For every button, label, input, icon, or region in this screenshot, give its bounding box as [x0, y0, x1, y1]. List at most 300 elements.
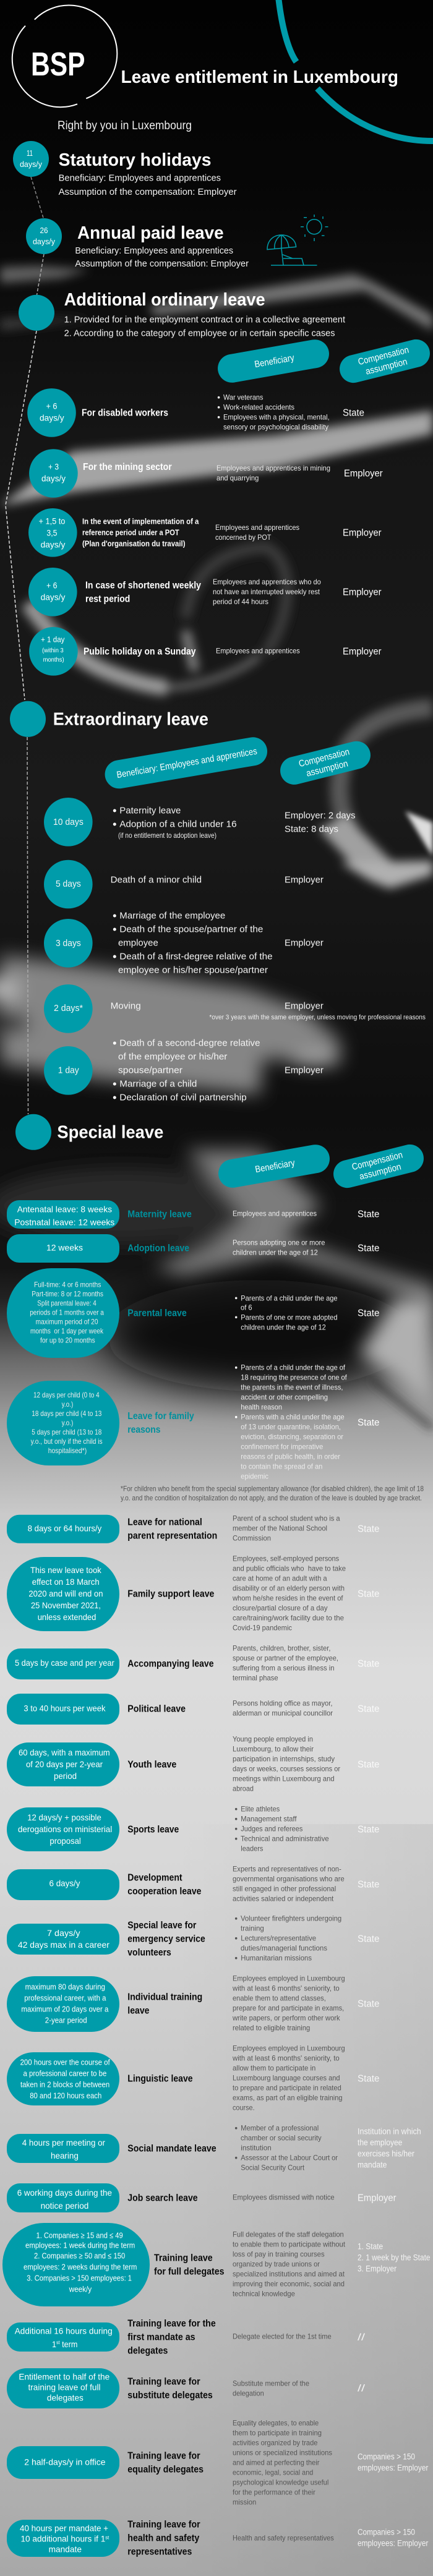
duration: 25 November 2021, — [31, 1600, 101, 1610]
additional leave intro — [64, 315, 346, 338]
beneficiary list — [235, 1914, 341, 1963]
beneficiary list: duties/managerial functions — [241, 1944, 327, 1953]
column header: compensation assumption — [337, 336, 433, 386]
column header: beneficiary — [215, 338, 332, 385]
beneficiary: to prepare and participate in related — [233, 2084, 341, 2092]
cases — [113, 1038, 260, 1103]
row: public holiday on a Sunday — [29, 627, 382, 676]
beneficiary: Parents, children, brother, sister, — [233, 1644, 330, 1653]
statutory holidays details: Assumption of the compensation: Employer — [59, 187, 237, 197]
duration — [7, 1742, 119, 1786]
beneficiary — [233, 2419, 332, 2507]
compensation: State — [358, 1308, 379, 1318]
beneficiary: exams, as part of an eligible training — [233, 2094, 343, 2102]
beneficiary: Delegate elected for the 1st time — [233, 2332, 332, 2341]
beneficiary list: Judges and referees — [241, 1825, 302, 1833]
duration: 2. Companies ≥ 50 and ≤ 150 — [34, 2251, 125, 2261]
badge: +3 days/y: days/y — [41, 473, 66, 483]
badge: 26 days/y: 26 — [40, 226, 48, 235]
beneficiary list: Work-related accidents — [223, 403, 294, 412]
beneficiary — [233, 1644, 338, 1683]
duration — [7, 2368, 119, 2408]
beneficiary: Employees and apprentices in mining — [216, 464, 330, 472]
compensation: State — [358, 1760, 379, 1770]
label: Job search leave — [127, 2193, 198, 2204]
beneficiary list: epidemic — [241, 1472, 268, 1481]
duration: of 20 days per 2-year — [26, 1759, 103, 1769]
beneficiary: organized by trade unions or — [233, 2260, 320, 2269]
row: maternity leave — [7, 1200, 379, 1229]
duration: 2020 and will end on — [28, 1589, 103, 1598]
compensation: State — [358, 1418, 379, 1428]
beneficiary list: of 6 — [241, 1303, 252, 1311]
badge: +6 days/y — [28, 568, 77, 616]
additional leave intro: 1. Provided for in the employment contract or in a collective agreement — [64, 315, 346, 325]
beneficiary: alderman or municipal councillor — [233, 1709, 333, 1718]
label: representatives — [127, 2547, 192, 2557]
duration: 2 half-days/y in office — [24, 2457, 106, 2467]
label: rest period — [85, 594, 130, 605]
row: adoption leave — [7, 1234, 379, 1263]
beneficiary: prepare for and participate in exams, — [233, 2004, 344, 2013]
beneficiary list: to contain the spread of an — [241, 1462, 322, 1471]
beneficiary: whom he/she resides in the event of — [232, 1594, 343, 1603]
row: sports leave — [7, 1805, 379, 1853]
heading: statutory holidays: Statutory holidays — [59, 150, 211, 170]
duration: 3. Companies > 150 employees: 1 — [27, 2274, 132, 2283]
beneficiary: Commission — [233, 1534, 271, 1543]
beneficiary: abroad — [233, 1785, 254, 1793]
label — [127, 1992, 202, 2016]
badge: +3 days/y — [29, 449, 78, 498]
compensation: 3. Employer — [358, 2264, 397, 2273]
compensation — [358, 2452, 429, 2472]
case: Moving — [111, 1001, 141, 1012]
compensation: Employer — [285, 1001, 324, 1012]
duration: 60 days, with a maximum — [19, 1747, 110, 1757]
badge: extraordinary leave — [10, 701, 46, 737]
column header: compensation assumption: assumption — [305, 758, 349, 779]
label — [127, 2520, 200, 2557]
column header: beneficiary: Beneficiary — [254, 1158, 296, 1175]
duration: Part-time: 8 or 12 months — [32, 1290, 103, 1299]
additional leave intro: 2. According to the category of employee or in certain specific cases — [64, 328, 335, 338]
badge: +1 day within 3 months: months) — [43, 656, 64, 663]
duration — [7, 1515, 119, 1543]
badge: +6 days/y: days/y — [40, 413, 64, 423]
label: volunteers — [127, 1948, 171, 1958]
compensation: State — [358, 1209, 379, 1220]
duration: mandate — [49, 2544, 82, 2554]
label: Parental leave — [127, 1308, 187, 1318]
duration: delegates — [47, 2393, 84, 2403]
beneficiary: activities organized by trade — [233, 2439, 318, 2447]
beneficiary: Employees and apprentices — [215, 523, 299, 532]
beneficiary list: Social Security Court — [241, 2164, 305, 2172]
label: health and safety — [127, 2533, 200, 2544]
duration — [7, 2134, 119, 2163]
badge: 1 day: 1 day — [58, 1065, 79, 1075]
compensation: State — [358, 1999, 379, 2010]
beneficiary — [232, 2044, 345, 2112]
duration: employees: 1 week during the term — [25, 2241, 135, 2250]
beneficiary: Young people employed in — [233, 1735, 313, 1744]
beneficiary list: Lecturers/representative — [241, 1934, 316, 1943]
beneficiary: suffering from a serious illness in — [233, 1664, 335, 1673]
beneficiary: with at least 6 months' seniority, to — [232, 2054, 340, 2063]
row: family support leave — [7, 1555, 379, 1632]
badge: +1.5 to 3.5 days/y: 3,5 — [46, 528, 58, 538]
cases: employee or his/her spouse/partner — [118, 965, 268, 976]
beneficiary list: accident or other compelling — [241, 1393, 328, 1402]
compensation: exercises his/her — [358, 2149, 414, 2158]
beneficiary list: Management staff — [241, 1815, 297, 1823]
row: individual training leave — [7, 1974, 379, 2032]
duration: hearing — [51, 2151, 79, 2160]
column header: compensation assumption: Compensation — [357, 344, 410, 367]
duration — [7, 1381, 119, 1465]
label: for full delegates — [154, 2267, 224, 2277]
beneficiary: Luxembourg language courses and — [233, 2074, 340, 2083]
badge: additional ordinary leave — [19, 295, 54, 331]
duration — [7, 2446, 119, 2479]
label: Political leave — [127, 1704, 186, 1715]
compensation: Employer — [343, 528, 381, 539]
compensation: State — [358, 1589, 379, 1600]
duration — [7, 1924, 119, 1955]
beneficiary: care/training/work facility due to the — [233, 1614, 344, 1623]
column header: compensation assumption: Compensation — [351, 1149, 404, 1172]
badge: 2 days — [44, 984, 93, 1033]
beneficiary list: Parents of one or more adopted — [241, 1313, 338, 1321]
label: Social mandate leave — [127, 2143, 216, 2154]
beneficiary list: Humanitarian missions — [241, 1954, 312, 1963]
duration: proposal — [49, 1836, 81, 1846]
duration — [7, 1557, 119, 1631]
label: equality delegates — [127, 2465, 204, 2475]
beneficiary: write papers, or perform other work — [232, 2014, 341, 2023]
label: Training leave for — [127, 2377, 200, 2387]
compensation: State — [358, 1704, 379, 1715]
duration: 10 additional hours if 1 — [21, 2533, 108, 2543]
beneficiary list: Employees with a physical, mental, — [223, 413, 330, 422]
label — [127, 2319, 216, 2356]
duration: 42 days max in a career — [18, 1940, 109, 1950]
duration: effect on 18 March — [32, 1577, 100, 1587]
duration: st — [56, 2340, 60, 2345]
badge: 26 days/y: days/y — [33, 237, 56, 246]
beneficiary: days or weeks, courses sessions or — [233, 1765, 340, 1773]
beneficiary: allow them to participate in — [233, 2064, 315, 2073]
label: Youth leave — [127, 1760, 177, 1770]
beneficiary — [215, 523, 299, 542]
duration: 2-year period — [45, 2016, 87, 2025]
cases: Adoption of a child under 16 — [119, 819, 237, 830]
duration: maximum period of 20 — [36, 1318, 98, 1326]
beneficiary: participation in internships, study — [233, 1755, 335, 1764]
label — [127, 1411, 194, 1435]
beneficiary list: Assessor at the Labour Court or — [241, 2154, 338, 2162]
duration: 8 days or 64 hours/y — [28, 1524, 101, 1533]
column header: beneficiary — [216, 1143, 332, 1190]
compensation — [285, 811, 355, 835]
cases: Declaration of civil partnership — [119, 1093, 247, 1103]
beneficiary — [216, 464, 330, 482]
beneficiary — [233, 1239, 325, 1257]
beneficiary: Substitute member of the — [233, 2379, 309, 2388]
beneficiary: Experts and representatives of non- — [233, 1865, 341, 1874]
column header: compensation assumption: assumption — [358, 1162, 402, 1182]
label — [154, 2253, 224, 2277]
duration — [7, 2052, 119, 2105]
label: Leave for family — [127, 1411, 194, 1422]
duration: 18 days per child (4 to 13 — [32, 1409, 102, 1418]
duration: derogations on ministerial — [18, 1824, 112, 1834]
duration — [7, 2322, 119, 2352]
badge: +3 days/y: + 3 — [48, 461, 59, 471]
badge: 5 days — [44, 860, 93, 908]
label: Training leave — [154, 2253, 213, 2264]
panel: statutory holidays — [13, 141, 237, 197]
beneficiary list: sensory or psychological disability — [223, 423, 328, 432]
compensation: Employer — [285, 1065, 324, 1076]
label: substitute delegates — [127, 2390, 213, 2401]
compensation: State — [358, 1524, 379, 1535]
compensation: the employee — [358, 2138, 402, 2147]
column header: beneficiary: Beneficiary — [254, 352, 295, 370]
duration: periods of 1 months over a — [30, 1308, 104, 1317]
badge: +1 day within 3 months: (within 3 — [42, 647, 64, 654]
duration — [7, 1268, 119, 1358]
badge: +6 days/y: + 6 — [46, 401, 58, 411]
label: For the mining sector — [83, 462, 172, 472]
column header: compensation assumption — [277, 738, 374, 788]
annual paid leave details: Beneficiary: Employees and apprentices — [75, 245, 233, 256]
badge: 10 days: 10 days — [53, 817, 84, 827]
annual paid leave details: Assumption of the compensation: Employer — [75, 258, 249, 269]
row: shortened weekly rest period — [28, 568, 382, 616]
label: Special leave for — [127, 1920, 196, 1930]
label: reasons — [127, 1425, 160, 1435]
timeline dashed connector — [6, 177, 44, 1114]
beneficiary list: leaders — [241, 1845, 263, 1853]
badge: 10 days — [44, 798, 93, 847]
cases: spouse/partner — [118, 1065, 182, 1076]
badge: 3 days — [44, 919, 93, 968]
duration: Full-time: 4 or 6 months — [34, 1281, 101, 1289]
duration: 12 days per child (0 to 4 — [33, 1391, 100, 1399]
badge: 5 days: 5 days — [56, 879, 81, 889]
badge: +1 day within 3 months: + 1 day — [41, 636, 65, 644]
badge: 2 days: 2 days* — [54, 1003, 83, 1013]
beneficiary — [233, 1514, 340, 1543]
cases — [113, 911, 273, 976]
duration: employees: 2 weeks during the term — [24, 2263, 137, 2272]
badge: +1.5 to 3.5 days/y: days/y — [41, 540, 65, 550]
row: training leave for health and safety representatives — [7, 2520, 429, 2557]
cases: (if no entitlement to adoption leave) — [118, 831, 216, 840]
duration: 6 working days during the — [17, 2188, 112, 2198]
beneficiary: technical knowledge — [233, 2290, 295, 2298]
beneficiary: enable them to attend classes, — [233, 1994, 326, 2003]
duration: a professional career to be — [24, 2068, 106, 2078]
label: Adoption leave — [127, 1243, 189, 1253]
beneficiary: improving their economic, social and — [233, 2280, 345, 2288]
duration: for up to 20 months — [40, 1336, 95, 1345]
label — [82, 518, 199, 548]
beneficiary: Employees employed in Luxembourg — [233, 1974, 345, 1983]
cases: Marriage of a child — [119, 1079, 197, 1090]
beneficiary list — [235, 1805, 329, 1853]
beneficiary list: Member of a professional — [241, 2124, 319, 2133]
label: Family support leave — [127, 1589, 215, 1600]
beneficiary: specialized institutions and aimed at — [233, 2270, 345, 2279]
badge: +6 days/y — [27, 388, 76, 437]
row: youth leave — [7, 1735, 379, 1793]
compensation: 1. State — [358, 2241, 383, 2251]
duration — [7, 1807, 119, 1851]
compensation: Institution in which — [358, 2126, 421, 2136]
duration: 6 days/y — [49, 1879, 80, 1888]
duration: 1. Companies ≥ 15 and ≤ 49 — [36, 2230, 123, 2240]
label: Sports leave — [127, 1825, 179, 1835]
cases: Paternity leave — [119, 806, 181, 816]
compensation: State — [358, 1880, 379, 1890]
label — [127, 1920, 205, 1958]
row: 3 days — [44, 911, 324, 976]
heading: special leave: Special leave — [57, 1122, 163, 1142]
beneficiary list: of 13 under quarantine, isolation, — [241, 1423, 341, 1431]
row: leave for family reasons — [7, 1363, 379, 1481]
row: political leave — [7, 1694, 379, 1725]
column header: compensation assumption: Compensation — [298, 746, 351, 769]
row: job search leave — [7, 2183, 397, 2212]
beneficiary list: Parents with a child under the age — [241, 1413, 345, 1422]
beneficiary: member of the National School — [233, 1524, 327, 1533]
beneficiary: Employees and apprentices — [233, 1209, 317, 1218]
beneficiary: terminal phase — [233, 1674, 278, 1683]
beneficiary list — [235, 1294, 338, 1331]
title: Leave entitlement in Luxembourg — [121, 67, 398, 87]
label — [85, 581, 201, 605]
duration: maximum of 20 days over a — [21, 2005, 109, 2014]
beneficiary: Employees and apprentices — [216, 647, 300, 655]
beneficiary list: confinement for imperative — [241, 1443, 324, 1451]
badge: 1 day — [44, 1046, 93, 1095]
duration: notice period — [41, 2201, 88, 2211]
logo: BSP: BSP — [31, 46, 85, 83]
badge: 11 days/y: days/y — [20, 160, 43, 169]
cases: employee — [118, 938, 158, 949]
duration — [2, 2223, 150, 2306]
badge: +1.5 to 3.5 days/y: + 1,5 to — [38, 516, 66, 526]
beneficiary: period of 44 hours — [213, 597, 268, 606]
cases: of the employee or his/her — [118, 1052, 227, 1062]
beneficiary: for the performance of their — [233, 2488, 315, 2497]
duration — [7, 1200, 119, 1229]
beneficiary list: Volunteer firefighters undergoing — [241, 1914, 341, 1923]
badge: 11 days/y — [13, 141, 49, 177]
beneficiary list: reasons of public health, in order — [241, 1452, 340, 1461]
label: parent representation — [127, 1531, 217, 1542]
row: disabled workers — [27, 388, 364, 437]
duration: st — [105, 2535, 109, 2540]
compensation: Employer — [285, 938, 324, 949]
duration: Split parental leave: 4 — [37, 1299, 96, 1308]
row: 2 days — [44, 984, 426, 1033]
duration: Postnatal leave: 12 weeks — [14, 1218, 114, 1227]
label: delegates — [127, 2346, 168, 2356]
beneficiary list: health reason — [241, 1403, 282, 1412]
duration — [7, 1694, 119, 1725]
duration: months or 1 day per week — [30, 1327, 104, 1336]
duration: 7 days/y — [47, 1928, 80, 1938]
panel: additional ordinary leave — [19, 290, 433, 676]
heading: extraordinary leave: Extraordinary leave — [53, 710, 208, 730]
cases — [113, 806, 237, 840]
row: development cooperation leave — [7, 1865, 379, 1903]
duration: y.o., but only if the child is — [31, 1437, 103, 1446]
duration: 12 weeks — [46, 1243, 83, 1253]
row: mining sector — [29, 449, 383, 498]
label: reference period under a POT — [82, 529, 179, 537]
beneficiary: Persons holding office as mayor, — [233, 1699, 333, 1708]
duration: y.o.) — [62, 1418, 73, 1427]
row: training leave for equality delegates — [7, 2419, 429, 2507]
beneficiary: to enable them to participate without — [233, 2240, 346, 2249]
badge: +6 days/y: + 6 — [46, 580, 58, 590]
beneficiary: with at least 6 months' seniority, to — [232, 1984, 340, 1993]
beneficiary: and aimed at perfecting their — [233, 2459, 320, 2467]
cases: Marriage of the employee — [119, 911, 225, 921]
label: Linguistic leave — [127, 2074, 193, 2084]
duration — [7, 2520, 119, 2557]
panel: special leave — [2, 1114, 431, 2557]
compensation: Employer — [358, 2193, 397, 2204]
column header: beneficiary: Beneficiary: Employees and apprentices — [116, 746, 258, 780]
duration: Antenatal leave: 8 weeks — [17, 1205, 112, 1214]
label: Training leave for — [127, 2520, 200, 2530]
compensation: State — [358, 1825, 379, 1835]
duration: maximum 80 days during — [25, 1982, 105, 1992]
duration: hospitalised*) — [48, 1446, 87, 1455]
beneficiary: spouse or partner of the employee, — [233, 1654, 338, 1663]
cases: Death of the spouse/partner of the — [119, 924, 263, 935]
beneficiary — [213, 578, 321, 606]
logo: BSP — [12, 5, 117, 107]
beneficiary: Employees dismissed with notice — [233, 2193, 335, 2202]
case: Death of a minor child — [111, 875, 202, 885]
beneficiary list: training — [241, 1924, 264, 1933]
beneficiary: Employees employed in Luxembourg — [233, 2044, 345, 2053]
duration — [7, 1648, 119, 1679]
label — [127, 2377, 213, 2401]
duration: Entitlement to half of the — [19, 2371, 109, 2381]
beneficiary list: the parents in the event of illness, — [241, 1383, 343, 1392]
row: national parent representation — [7, 1514, 379, 1543]
compensation: Companies > 150 — [358, 2527, 415, 2536]
statutory holidays details: Beneficiary: Employees and apprentices — [59, 173, 221, 184]
duration: 4 hours per meeting or — [22, 2138, 105, 2147]
beneficiary: care at home of an adult with a — [233, 1574, 327, 1583]
duration: period — [54, 1771, 77, 1781]
beneficiary: mission — [233, 2498, 256, 2507]
duration: 1 — [52, 2339, 57, 2349]
decorative teal ring behind title — [278, 0, 433, 141]
badge: +1.5 to 3.5 days/y — [28, 508, 77, 557]
beneficiary list: Technical and administrative — [241, 1835, 329, 1843]
duration: taken in 2 blocks of between — [20, 2079, 109, 2089]
